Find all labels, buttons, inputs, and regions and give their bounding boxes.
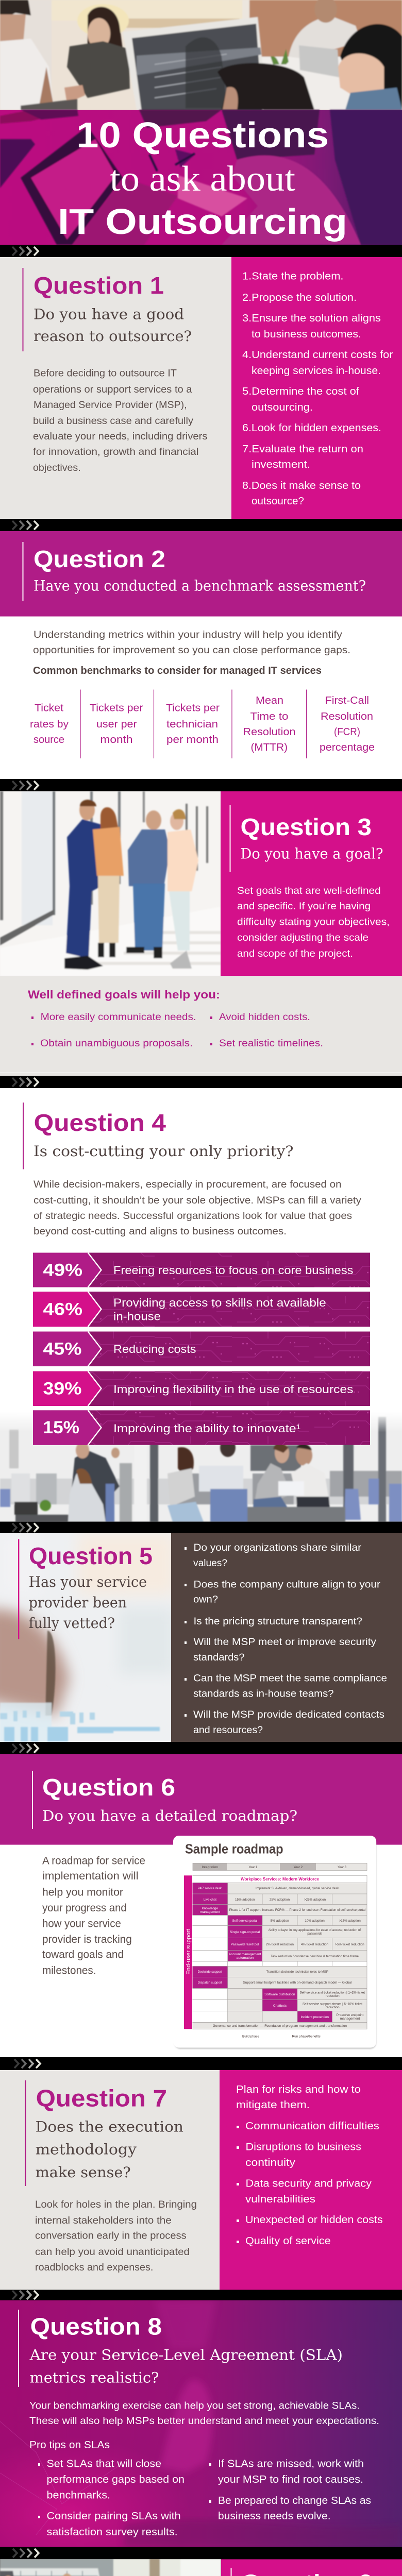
table: five benchmarks: Ticket bbox=[35, 703, 63, 714]
text: question 8 intro: These will also help MSPs better understand and meet your expectations. bbox=[29, 2416, 379, 2427]
list: eight business case steps: outsourcing. bbox=[252, 402, 313, 413]
heading: question 8: Question 8 bbox=[30, 2313, 162, 2340]
panel: question 1 bbox=[0, 257, 402, 519]
text: question 3 intro: consider adjusting the scale bbox=[237, 933, 368, 943]
list: pro tips on SLAs: performance gaps based on bbox=[46, 2474, 185, 2485]
chart: reasons for outsourcing percentages bbox=[33, 1253, 370, 1445]
roadmap table: Task reduction / condense new hire & termination time frame bbox=[271, 1955, 359, 1958]
text: question 1 intro: evaluate your needs, including drivers bbox=[33, 431, 207, 442]
list: risks to mitigate: mitigate them. bbox=[236, 2099, 310, 2111]
roadmap table: 10% adoption bbox=[305, 1919, 325, 1923]
heading: question 4 bbox=[34, 1109, 294, 1160]
roadmap table: Support small footprint facilities with on-demand dispatch model — Global bbox=[243, 1981, 352, 1985]
list: eight business case steps: 1.State the problem. bbox=[242, 271, 343, 282]
list: risks to mitigate: Plan for risks and how to bbox=[236, 2084, 361, 2095]
heading: question 4: Is cost-cutting your only priority? bbox=[34, 1143, 294, 1160]
heading: question 7: Does the execution bbox=[36, 2119, 183, 2136]
table: five benchmarks: (FCR) bbox=[334, 726, 360, 738]
heading: question 1 bbox=[34, 272, 192, 345]
text: question 2 intro: Understanding metrics within your industry will help you identify bbox=[34, 630, 343, 640]
roadmap timeline header: Year 3 bbox=[338, 1866, 346, 1869]
roadmap table: Ability to layer in key applications for ease of access; reduction of bbox=[269, 1928, 361, 1932]
heading: question 4: Question 4 bbox=[34, 1109, 166, 1136]
roadmap table: Password reset tool bbox=[231, 1943, 259, 1946]
table: five benchmarks: per month bbox=[166, 734, 219, 745]
photo: four colleagues talking in corridor bbox=[0, 791, 221, 976]
list: risks to mitigate: Data security and privacy bbox=[245, 2178, 372, 2189]
list: pro tips on SLAs: your MSP to find root causes. bbox=[218, 2474, 363, 2485]
roadmap timeline header: Integration bbox=[202, 1866, 218, 1869]
heading: question 5: Has your service bbox=[29, 1573, 147, 1590]
heading: question 6: Do you have a detailed roadmap? bbox=[42, 1807, 297, 1824]
table: five benchmarks: percentage bbox=[320, 742, 375, 753]
hero photo: team at computers bbox=[0, 0, 402, 245]
roadmap table: Incident prevention bbox=[301, 2015, 329, 2019]
table: five benchmarks: Resolution bbox=[243, 726, 296, 738]
list: eight business case steps bbox=[242, 271, 393, 507]
heading: question 1: reason to outsource? bbox=[34, 328, 192, 345]
roadmap table: Chatbots bbox=[273, 2004, 287, 2008]
chevron divider bar bbox=[0, 1742, 402, 1754]
roadmap table: Self-service support stream | 5–10% ticket bbox=[303, 2003, 362, 2006]
list: pro tips on SLAs: satisfaction survey results. bbox=[46, 2527, 178, 2538]
chevron divider bar bbox=[0, 779, 402, 791]
table: five benchmarks: source bbox=[34, 734, 64, 745]
roadmap table: 24/7 service desk bbox=[198, 1887, 222, 1890]
list: vetting questions: Does the company culture align to your bbox=[194, 1580, 381, 1590]
text: question 6 intro: how your service bbox=[42, 1918, 121, 1930]
panel: question 8 bbox=[0, 2300, 402, 2547]
background: magenta gradient with faint hand bbox=[0, 2300, 402, 2547]
list: pro tips on SLAs: Consider pairing SLAs with bbox=[46, 2511, 181, 2522]
roadmap timeline header: Year 2 bbox=[294, 1866, 303, 1869]
panel: question 6 bbox=[0, 1754, 402, 2049]
text: question 3 intro: and scope of the project. bbox=[237, 948, 353, 959]
list: vetting questions: values? bbox=[193, 1558, 227, 1569]
roadmap timeline header bbox=[193, 1863, 367, 1870]
chevron divider bar bbox=[0, 2057, 402, 2070]
list: pro tips on SLAs: Pro tips on SLAs bbox=[29, 2439, 110, 2451]
list: risks to mitigate: Quality of service bbox=[245, 2235, 331, 2247]
text: question 6 intro: provider is tracking bbox=[42, 1934, 132, 1945]
list: vetting questions: Do your organizations share similar bbox=[194, 1543, 362, 1553]
hero title: IT Outsourcing bbox=[58, 201, 347, 242]
text: question 7 intro: conversation early in the process bbox=[35, 2231, 187, 2242]
roadmap table: management bbox=[340, 2017, 360, 2021]
text: question 4 intro: of strategic needs. Successful organizations look for value that goes bbox=[34, 1211, 352, 1222]
roadmap table: 4% ticket reduction bbox=[301, 1943, 328, 1946]
table: five benchmarks: Tickets per bbox=[90, 703, 143, 714]
heading: question 5: provider been bbox=[29, 1594, 127, 1611]
subheading: well defined goals: Well defined goals will help you: bbox=[28, 988, 220, 1001]
roadmap table: Self-service portal bbox=[232, 1919, 258, 1923]
roadmap table: Governance and transformation — Foundation of program management and transformation bbox=[213, 2024, 347, 2028]
heading: question 7: Question 7 bbox=[36, 2084, 167, 2111]
roadmap table: Knowledge bbox=[202, 1907, 218, 1910]
roadmap table: Dispatch support bbox=[198, 1981, 222, 1985]
panel: question 2 bbox=[0, 531, 402, 758]
roadmap table: management bbox=[200, 1910, 220, 1914]
roadmap legend: Run phase/benefits bbox=[292, 2035, 321, 2038]
bar: 39 percent: Improving flexibility in the use of resources bbox=[113, 1383, 354, 1396]
text: question 4 intro: cost-cutting, it shouldn’t be your sole objective. MSPs can fill a variety bbox=[34, 1195, 362, 1206]
panel: question 4 bbox=[0, 1103, 402, 1522]
table: five benchmarks: Tickets per bbox=[166, 703, 220, 714]
text: question 3 intro bbox=[237, 886, 390, 959]
table: five benchmarks: First-Call bbox=[325, 695, 369, 706]
roadmap table: 15% adoption bbox=[235, 1898, 255, 1902]
table: five benchmarks bbox=[30, 689, 375, 758]
chevron divider bar bbox=[0, 1522, 402, 1533]
table: five benchmarks: technician bbox=[166, 719, 218, 730]
list: eight business case steps: keeping services in-house. bbox=[252, 365, 381, 377]
list: pro tips on SLAs bbox=[29, 2439, 371, 2538]
list: risks to mitigate: Unexpected or hidden costs bbox=[245, 2214, 383, 2226]
bar: 45 percent: 45% bbox=[43, 1340, 81, 1359]
chevron divider bar bbox=[0, 2290, 402, 2300]
roadmap table: 5% adoption bbox=[271, 1919, 289, 1923]
table: five benchmarks: (MTTR) bbox=[250, 742, 288, 753]
roadmap table: Phase 1 for IT support: Increase FCR% — Phase 2 for end user: Foundation of self-service portal bbox=[229, 1908, 365, 1912]
list: eight business case steps: investment. bbox=[252, 459, 310, 470]
heading: question 7: methodology bbox=[36, 2141, 137, 2158]
list: pro tips on SLAs: If SLAs are missed, work with bbox=[218, 2459, 364, 2470]
text: question 6 intro: A roadmap for service bbox=[42, 1855, 145, 1867]
roadmap timeline header: Year 1 bbox=[248, 1866, 257, 1869]
list: risks to mitigate: Communication difficulties bbox=[245, 2121, 379, 2132]
bar: 39 percent: 39% bbox=[43, 1379, 81, 1398]
text: question 6 intro: help you monitor bbox=[42, 1887, 123, 1899]
table: five benchmarks: user per bbox=[96, 719, 137, 730]
roadmap table: automation bbox=[237, 1956, 254, 1960]
heading: question 2: Have you conducted a benchmark assessment? bbox=[34, 578, 366, 595]
list: eight business case steps: 4.Understand current costs for bbox=[242, 349, 393, 361]
bar: 46 percent: Providing access to skills not available bbox=[113, 1296, 326, 1309]
hero title: 10 Questions bbox=[76, 115, 329, 155]
text: question 7 intro: roadblocks and expenses. bbox=[35, 2262, 153, 2273]
table: five benchmarks: Time to bbox=[250, 711, 289, 722]
text: question 4 intro bbox=[34, 1179, 362, 1237]
chevron divider bar bbox=[0, 245, 402, 257]
chevron divider bar bbox=[0, 1076, 402, 1088]
list: eight business case steps: outsource? bbox=[252, 496, 304, 507]
list: risks to mitigate bbox=[236, 2084, 383, 2247]
panel: question 3 bbox=[0, 791, 402, 1076]
roadmap table: Software distribution bbox=[264, 1993, 295, 1996]
text: question 1 intro: Before deciding to outsource IT bbox=[34, 368, 177, 379]
text: question 2 intro: opportunities for improvement so you can close performance gaps. bbox=[33, 645, 350, 656]
list: goal benefits bbox=[31, 1012, 323, 1049]
bar: 39 percent bbox=[33, 1371, 370, 1406]
heading: question 5: fully vetted? bbox=[29, 1615, 115, 1632]
table: five benchmarks: month bbox=[100, 734, 133, 745]
vertical label: end-user support: End-user support bbox=[186, 1929, 192, 1975]
text: question 6 intro: implementation will bbox=[42, 1870, 139, 1882]
list: pro tips on SLAs: Be prepared to change SLAs as bbox=[218, 2495, 371, 2506]
text: question 7 intro: can help you avoid unanticipated bbox=[35, 2247, 190, 2258]
list: goal benefits: Obtain unambiguous proposals. bbox=[40, 1038, 193, 1049]
text: question 8 intro: Your benchmarking exercise can help you set strong, achievable SLAs. bbox=[29, 2400, 360, 2411]
text: question 1 intro bbox=[33, 368, 207, 473]
chevron divider bar bbox=[0, 2547, 402, 2560]
list: goal benefits: Avoid hidden costs. bbox=[219, 1012, 310, 1023]
text: question 7 intro: internal stakeholders into the bbox=[35, 2215, 172, 2226]
heading: question 2 bbox=[34, 546, 366, 595]
text: question 4 intro: beyond cost-cutting and aligns to business outcomes. bbox=[34, 1226, 287, 1237]
roadmap table: 25% adoption bbox=[270, 1898, 290, 1902]
roadmap table: >15% adoption bbox=[339, 1919, 361, 1923]
heading: question 5: Question 5 bbox=[29, 1543, 153, 1569]
text: question 6 intro: milestones. bbox=[42, 1965, 96, 1976]
text: question 3 intro: Set goals that are well-defined bbox=[237, 886, 381, 896]
text: question 2 intro bbox=[33, 630, 350, 656]
text: question 3 intro: and specific. If you’re having bbox=[237, 901, 371, 912]
table: five benchmarks: Mean bbox=[256, 695, 283, 706]
hero title: to ask about bbox=[110, 159, 296, 199]
heading: question 7: make sense? bbox=[36, 2164, 131, 2181]
panel: question 7 bbox=[0, 2070, 402, 2290]
heading: question 3: Do you have a goal? bbox=[240, 845, 383, 862]
roadmap table: 2% ticket reduction bbox=[266, 1943, 294, 1946]
hero panel bbox=[0, 0, 402, 245]
photo: presenter at whiteboard with team bbox=[0, 2559, 221, 2576]
heading: question 7 bbox=[36, 2084, 183, 2181]
heading: question 3: Question 3 bbox=[240, 814, 372, 840]
list: risks to mitigate: continuity bbox=[245, 2157, 295, 2168]
list: eight business case steps: 3.Ensure the solution aligns bbox=[242, 313, 381, 324]
list: goal benefits: More easily communicate needs. bbox=[41, 1012, 196, 1023]
list: risks to mitigate: Disruptions to business bbox=[245, 2141, 361, 2153]
text: question 7 intro bbox=[35, 2199, 197, 2273]
list: eight business case steps: to business outcomes. bbox=[252, 329, 361, 340]
table: five benchmarks: Resolution bbox=[321, 711, 373, 722]
hero title bbox=[58, 115, 347, 242]
roadmap table: >25% adoption bbox=[304, 1898, 326, 1902]
roadmap table bbox=[193, 1875, 367, 2029]
photo: pale hand with pen over charts bbox=[0, 1533, 175, 1742]
text: question 8 intro bbox=[29, 2400, 379, 2427]
text: question 4 intro: While decision-makers, especially in procurement, are focused on bbox=[34, 1179, 341, 1190]
text: question 1 intro: Managed Service Provider (MSP), bbox=[34, 400, 187, 411]
roadmap table: Self-service and ticket reduction | 1–2% ticket bbox=[300, 1991, 365, 1995]
roadmap table: Proactive endpoint bbox=[337, 2013, 363, 2017]
text: question 6 intro: toward goals and bbox=[42, 1949, 124, 1961]
text: question 7 intro: Look for holes in the plan. Bringing bbox=[35, 2199, 197, 2210]
table: five benchmarks: rates by bbox=[30, 719, 69, 730]
heading: question 6: Question 6 bbox=[42, 1774, 175, 1801]
text: question 6 intro bbox=[42, 1855, 145, 1976]
bar: 45 percent bbox=[33, 1331, 370, 1366]
list: vetting questions bbox=[185, 1543, 387, 1736]
text: question 1 intro: for innovation, growth and financial bbox=[33, 447, 198, 457]
heading: question 8: Are your Service-Level Agreement (SLA) bbox=[29, 2347, 343, 2364]
text: question 6 intro: your progress and bbox=[42, 1902, 127, 1914]
roadmap table: Live chat bbox=[204, 1898, 216, 1902]
heading: question 5 bbox=[29, 1543, 153, 1632]
bar: 49 percent: 49% bbox=[43, 1260, 82, 1280]
list: eight business case steps: 8.Does it make sense to bbox=[242, 480, 361, 492]
roadmap table: Implement SLA-driven, demand-based, global service desk. bbox=[256, 1887, 340, 1890]
subheading: common benchmarks: Common benchmarks to consider for managed IT services bbox=[33, 665, 322, 676]
bar: 46 percent: in-house bbox=[113, 1310, 161, 1323]
roadmap table: reduction bbox=[326, 1994, 340, 1998]
heading: question 1: Question 1 bbox=[34, 272, 164, 299]
list: vetting questions: Can the MSP meet the same compliance bbox=[193, 1673, 387, 1684]
list: vetting questions: Is the pricing structure transparent? bbox=[194, 1616, 362, 1627]
photo: open plan office bbox=[0, 1412, 402, 1522]
panel: well defined goals bbox=[0, 976, 402, 1076]
roadmap table: passwords bbox=[307, 1932, 323, 1936]
list: vetting questions: Will the MSP provide dedicated contacts bbox=[193, 1709, 384, 1720]
bar: 46 percent: 46% bbox=[43, 1299, 82, 1319]
roadmap table: Workplace Services: Modern Workforce bbox=[241, 1876, 319, 1882]
bar: 15 percent: 15% bbox=[43, 1418, 79, 1437]
roadmap table: Single sign-on portal bbox=[230, 1930, 260, 1934]
list: pro tips on SLAs: benchmarks. bbox=[46, 2490, 110, 2501]
list: vetting questions: own? bbox=[193, 1595, 218, 1605]
roadmap table: >5% ticket reduction bbox=[335, 1943, 364, 1946]
roadmap table: reduction bbox=[326, 2006, 340, 2009]
chevron divider bar bbox=[0, 519, 402, 531]
text: question 1 intro: objectives. bbox=[33, 463, 81, 473]
list: pro tips on SLAs: Set SLAs that will close bbox=[46, 2459, 161, 2470]
list: goal benefits: Set realistic timelines. bbox=[219, 1038, 323, 1049]
list: eight business case steps: 5.Determine the cost of bbox=[242, 386, 359, 397]
text: question 1 intro: build a business case and carefully bbox=[33, 416, 194, 427]
roadmap legend bbox=[242, 2035, 321, 2038]
list: vetting questions: standards as in-house teams? bbox=[193, 1689, 334, 1700]
bar: 46 percent bbox=[33, 1292, 370, 1327]
card: sample roadmap bbox=[173, 1836, 376, 2049]
panel: question 9 bbox=[0, 2559, 402, 2576]
bar: 45 percent: Reducing costs bbox=[113, 1343, 196, 1355]
roadmap table: Deskside support bbox=[198, 1970, 222, 1974]
panel: question 5 bbox=[0, 1533, 402, 1742]
heading: question 2: Question 2 bbox=[34, 546, 165, 572]
list: vetting questions: Will the MSP meet or improve security bbox=[194, 1637, 377, 1648]
heading: question 8 bbox=[29, 2313, 343, 2386]
heading: question 8: metrics realistic? bbox=[30, 2369, 159, 2386]
heading: question 1: Do you have a good bbox=[34, 306, 184, 323]
list: eight business case steps: 2.Propose the solution. bbox=[242, 292, 357, 303]
list: eight business case steps: 7.Evaluate the return on bbox=[242, 444, 363, 455]
heading: question 3 bbox=[240, 814, 383, 862]
list: vetting questions: and resources? bbox=[193, 1725, 263, 1736]
bar: 15 percent: Improving the ability to innovate¹ bbox=[113, 1422, 300, 1435]
list: risks to mitigate: vulnerabilities bbox=[245, 2194, 315, 2205]
bar: 49 percent: Freeing resources to focus on core business bbox=[113, 1264, 354, 1277]
text: question 3 intro: difficulty stating your objectives, bbox=[237, 917, 390, 928]
list: pro tips on SLAs: business needs evolve. bbox=[218, 2511, 331, 2522]
list: vetting questions: standards? bbox=[193, 1652, 244, 1663]
list: eight business case steps: 6.Look for hidden expenses. bbox=[242, 422, 381, 434]
roadmap table: Transition deskside technician roles to MSP bbox=[266, 1970, 329, 1974]
vertical label: end-user support bbox=[184, 1875, 192, 2029]
roadmap legend: Build phase bbox=[242, 2035, 259, 2038]
heading: question 6 bbox=[42, 1774, 297, 1824]
text: question 1 intro: operations or support services to a bbox=[33, 384, 192, 395]
bar: 49 percent bbox=[33, 1253, 370, 1287]
roadmap table: Account management bbox=[229, 1953, 261, 1956]
bar: 15 percent bbox=[33, 1410, 370, 1445]
card heading: Sample roadmap bbox=[185, 1841, 283, 1857]
